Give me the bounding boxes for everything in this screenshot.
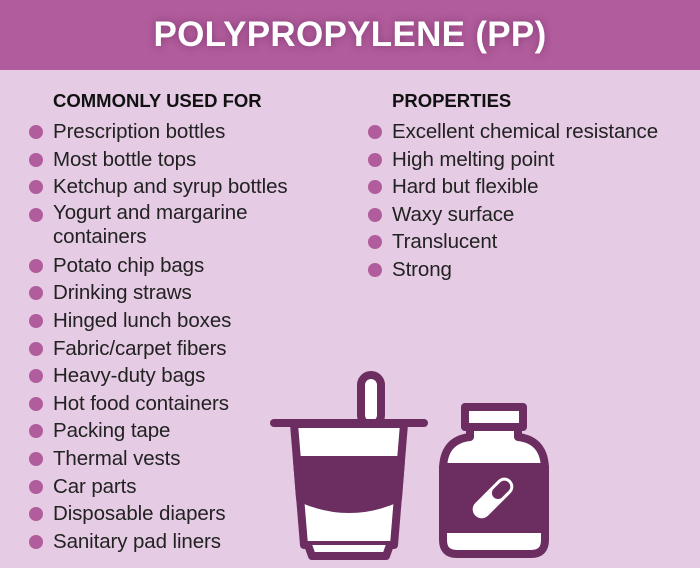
list: uses: Potato chip bags [53, 254, 204, 277]
list: uses: Hot food containers [53, 392, 229, 415]
list: uses: Disposable diapers [53, 502, 226, 525]
list: uses: Heavy-duty bags [53, 364, 205, 387]
heading: properties: PROPERTIES [392, 90, 511, 111]
list: properties: Waxy surface [392, 203, 514, 226]
panel: properties [368, 90, 658, 281]
list: properties: Translucent [392, 230, 497, 253]
icon: yogurt cup [274, 375, 424, 556]
list: uses: Packing tape [53, 419, 170, 442]
list: uses: Sanitary pad liners [53, 530, 221, 553]
icon: pill bottle [443, 407, 545, 554]
list: uses: Fabric/carpet fibers [53, 337, 226, 360]
title [0, 0, 700, 70]
list: uses: Prescription bottles [53, 120, 225, 143]
title: POLYPROPYLENE (PP) [153, 15, 547, 54]
list: uses: Drinking straws [53, 281, 192, 304]
heading: commonly used for: COMMONLY USED FOR [53, 90, 262, 111]
panel: commonly used for [29, 90, 288, 553]
list: uses: Yogurt and margarine [53, 201, 247, 224]
list: properties: High melting point [392, 148, 554, 171]
list: uses: Thermal vests [53, 447, 180, 470]
list: uses: containers [53, 225, 147, 248]
list: uses: Ketchup and syrup bottles [53, 175, 288, 198]
list: properties: Excellent chemical resistance [392, 120, 658, 143]
list: uses: Car parts [53, 475, 136, 498]
list: properties [368, 120, 658, 281]
list: properties: Hard but flexible [392, 175, 538, 198]
list: uses: Hinged lunch boxes [53, 309, 231, 332]
list: uses: Most bottle tops [53, 148, 196, 171]
list: properties: Strong [392, 258, 452, 281]
list: uses [29, 120, 288, 553]
